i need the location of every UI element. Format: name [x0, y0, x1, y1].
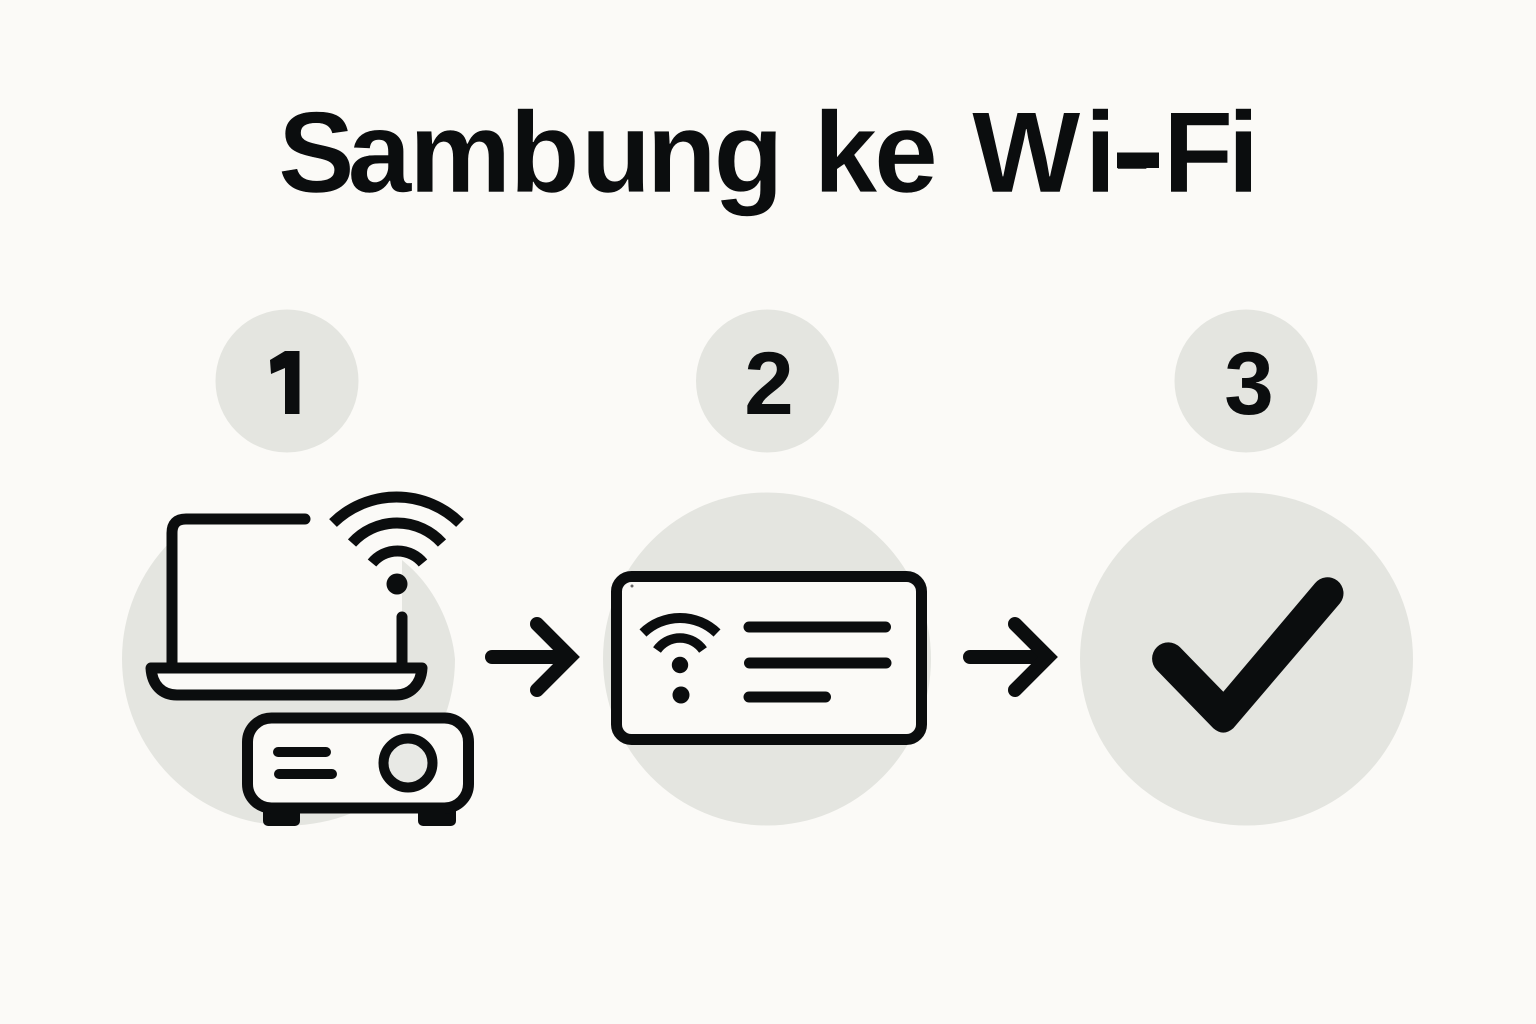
icon: laptop — [151, 490, 470, 695]
text lines in card — [749, 627, 886, 697]
step number badge 3: 3 — [1224, 333, 1274, 433]
arrow: step 1 to step 2 — [492, 624, 570, 690]
icon: wifi signal — [333, 497, 460, 594]
icon: wifi in card — [643, 618, 717, 704]
network settings card — [616, 576, 922, 740]
step number badge 2: 2 — [744, 333, 794, 433]
step number badge 2 — [696, 310, 839, 452]
title: Sambung ke Wi-Fi — [278, 89, 1259, 217]
background circle: step 3 — [1080, 492, 1413, 826]
background circle: step 2 — [603, 492, 931, 826]
arrow: step 2 to step 3 — [970, 624, 1048, 690]
panel: step 1 — [122, 310, 470, 826]
icon: router — [248, 718, 468, 826]
step number badge 1 — [216, 310, 358, 452]
infographic canvas — [122, 108, 1413, 826]
step number badge 3 — [1174, 310, 1318, 452]
icon: check mark — [1152, 577, 1343, 733]
background circle: step 1 — [122, 492, 455, 826]
panel: step 3 — [1080, 310, 1413, 826]
panel: step 2 — [603, 310, 931, 826]
step number badge 1: 1 — [267, 333, 317, 433]
